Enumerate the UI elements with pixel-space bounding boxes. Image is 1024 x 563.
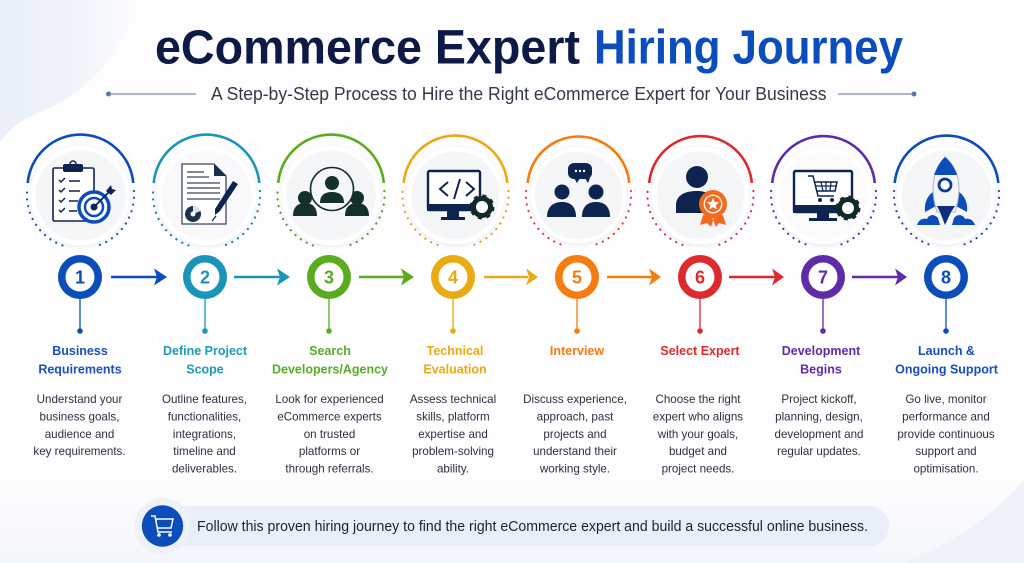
description: budget and xyxy=(669,445,727,458)
icon: rocket xyxy=(917,157,975,225)
heading: Define Project xyxy=(163,344,248,358)
title: Hiring Journey xyxy=(594,22,903,74)
step number 8: 8 xyxy=(941,268,951,288)
arrow 1 to 2 xyxy=(111,276,157,278)
callout text: Follow this proven hiring journey to find the right eCommerce expert and build a successful online business. xyxy=(197,518,868,535)
description: business goals, xyxy=(40,410,119,424)
description: platforms or xyxy=(299,445,360,458)
description: deliverables. xyxy=(172,462,237,476)
description: Understand your xyxy=(37,393,122,406)
heading: Technical xyxy=(427,344,483,358)
ring 1 xyxy=(27,135,134,246)
icon: shopping cart xyxy=(134,498,190,554)
ring 7 xyxy=(771,136,876,244)
heading: Begins xyxy=(800,362,842,376)
description: Choose the right xyxy=(655,393,741,406)
arrow 4 to 5 xyxy=(484,276,528,278)
description: Project kickoff, xyxy=(781,393,857,406)
description: eCommerce experts xyxy=(277,410,382,424)
panel: step 3 search developers xyxy=(272,135,388,476)
heading: Scope xyxy=(186,362,224,376)
description: Go live, monitor xyxy=(905,393,987,406)
description: ability. xyxy=(437,462,469,476)
description: development and xyxy=(775,428,863,441)
description: skills, platform xyxy=(416,410,490,424)
arrow head xyxy=(154,268,167,286)
connector xyxy=(574,299,580,334)
heading: Launch & xyxy=(918,344,975,358)
title xyxy=(155,22,903,74)
panel: step 4 technical evaluation xyxy=(402,136,509,476)
step number 1 xyxy=(58,255,102,299)
connector xyxy=(943,299,949,334)
heading: Evaluation xyxy=(423,362,487,376)
heading: Search xyxy=(309,344,351,358)
connector xyxy=(202,299,208,334)
heading: Requirements xyxy=(38,362,122,376)
panel: step 2 define project scope xyxy=(153,135,260,476)
description: Discuss experience, xyxy=(523,393,627,406)
step number 3 xyxy=(307,255,351,299)
description: working style. xyxy=(539,462,610,476)
ring 3 xyxy=(277,135,385,246)
description: integrations, xyxy=(173,428,236,441)
description: timeline and xyxy=(173,445,236,458)
description: with your goals, xyxy=(657,428,738,441)
step number 5: 5 xyxy=(572,268,582,288)
panel: step 5 interview xyxy=(523,137,631,476)
connector xyxy=(77,299,83,334)
step number 6 xyxy=(678,255,722,299)
heading: Interview xyxy=(550,344,604,358)
step number 4: 4 xyxy=(448,268,458,288)
description: Outline features, xyxy=(162,393,247,406)
heading: Developers/Agency xyxy=(272,362,388,376)
description: projects and xyxy=(543,428,607,441)
description: Assess technical xyxy=(410,393,496,406)
ring 2 xyxy=(153,135,260,246)
icon: code monitor and gear xyxy=(427,171,493,220)
connector xyxy=(450,299,456,334)
description: optimisation. xyxy=(913,462,979,476)
callout banner xyxy=(134,498,889,554)
description: expert who aligns xyxy=(653,410,743,424)
panel: step 8 launch and support xyxy=(894,136,999,476)
description: expertise and xyxy=(418,428,488,441)
description: audience and xyxy=(45,428,114,441)
step number 2: 2 xyxy=(200,268,210,288)
step number 7 xyxy=(801,255,845,299)
description: on trusted xyxy=(304,428,355,441)
arrow 6 to 7 xyxy=(729,276,775,278)
subtitle right rule xyxy=(838,92,916,96)
description: performance and xyxy=(902,410,990,424)
arrow head xyxy=(772,268,784,286)
icon: person with award badge xyxy=(676,166,727,227)
step number 8 xyxy=(924,255,968,299)
title: eCommerce Expert xyxy=(155,22,580,74)
description: through referrals. xyxy=(285,462,374,476)
icon: people group xyxy=(293,168,369,216)
panel: step 6 select expert xyxy=(647,136,754,476)
ring 4 xyxy=(402,136,509,245)
connector xyxy=(820,299,826,334)
arrow 2 to 3 xyxy=(234,276,280,278)
connector xyxy=(697,299,703,334)
arrow head xyxy=(526,268,538,286)
panel: step 7 development begins xyxy=(771,136,876,458)
icon: clipboard and target xyxy=(53,161,116,222)
heading: Business xyxy=(52,344,108,358)
description: problem-solving xyxy=(412,445,494,458)
step number 1: 1 xyxy=(75,268,85,288)
description: approach, past xyxy=(537,410,614,424)
icon: document and pen xyxy=(182,164,238,224)
description: regular updates. xyxy=(777,445,861,458)
step number 3: 3 xyxy=(324,268,334,288)
arrow 3 to 4 xyxy=(359,276,404,278)
step number 4 xyxy=(431,255,475,299)
description: Look for experienced xyxy=(275,393,384,406)
description: functionalities, xyxy=(168,410,241,424)
ring 5 xyxy=(526,137,631,244)
step number 5 xyxy=(555,255,599,299)
step number 6: 6 xyxy=(695,268,705,288)
description: provide continuous xyxy=(897,428,995,441)
arrow head xyxy=(277,268,290,286)
arrow head xyxy=(649,268,661,286)
connector xyxy=(326,299,332,334)
arrow head xyxy=(401,268,414,286)
step number 7: 7 xyxy=(818,268,828,288)
heading: Ongoing Support xyxy=(895,362,999,376)
arrow 7 to 8 xyxy=(852,276,898,278)
description: key requirements. xyxy=(33,445,126,458)
description: support and xyxy=(915,445,977,458)
panel: step 1 business requirements xyxy=(27,135,134,458)
ring 6 xyxy=(647,136,754,245)
arrow 5 to 6 xyxy=(607,276,652,278)
ring 8 xyxy=(894,136,999,244)
heading: Development xyxy=(782,344,861,358)
heading: Select Expert xyxy=(660,344,740,358)
description: project needs. xyxy=(662,462,734,476)
description: planning, design, xyxy=(775,410,863,424)
description: understand their xyxy=(533,445,617,458)
subtitle left rule xyxy=(106,92,196,96)
step number 2 xyxy=(183,255,227,299)
icon: cart monitor and gear xyxy=(793,171,859,221)
icon: two people talking xyxy=(547,163,610,217)
arrow head xyxy=(895,268,907,286)
subtitle: A Step-by-Step Process to Hire the Right eCommerce Expert for Your Business xyxy=(211,84,826,104)
